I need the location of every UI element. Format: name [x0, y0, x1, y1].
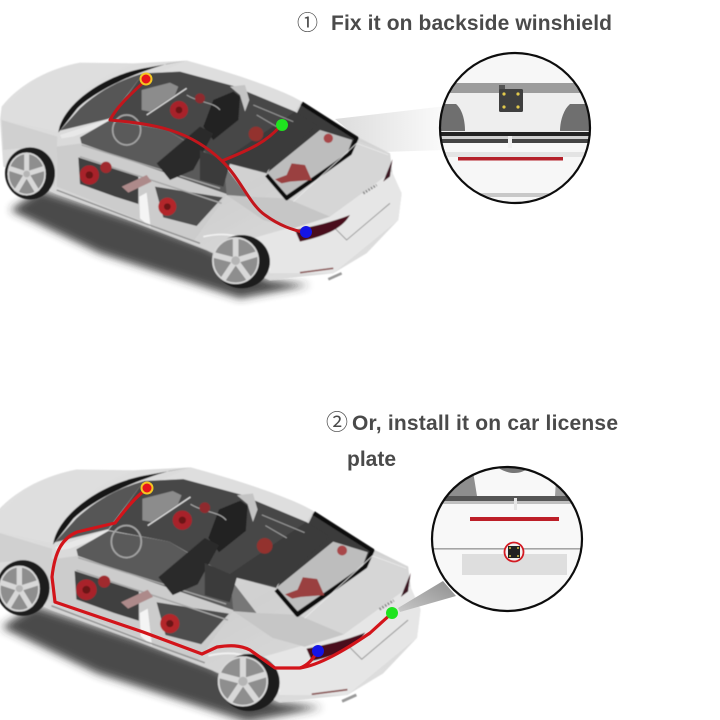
camera with red ring	[504, 542, 524, 562]
title: step 2 continued: plate	[347, 448, 396, 471]
marker: green camera point	[386, 607, 398, 619]
marker: blue reverse light point	[312, 645, 324, 657]
red cable route	[110, 80, 306, 233]
title: step 1: ①	[297, 12, 318, 35]
marker: yellow and red power point	[142, 482, 152, 494]
red cable route	[52, 488, 392, 668]
detail circle: camera on back windshield	[438, 50, 593, 206]
title: step 2: Or, install it on car license	[352, 412, 618, 435]
camera	[499, 85, 523, 112]
marker: green camera point	[276, 119, 288, 131]
title: step 1: Fix it on backside winshield	[331, 12, 612, 35]
marker: yellow and red power point	[140, 74, 152, 84]
detail circle: camera on license plate	[430, 465, 585, 615]
blue branch cable	[300, 651, 318, 668]
light beam to camera detail 1	[335, 106, 446, 152]
title: step 2: ②	[326, 410, 348, 435]
marker: blue reverse light point	[300, 226, 312, 238]
illustration: car with windshield camera wiring	[0, 61, 402, 298]
illustration: car with license plate camera wiring	[0, 467, 421, 720]
pointer beam to camera detail 2	[398, 581, 456, 612]
